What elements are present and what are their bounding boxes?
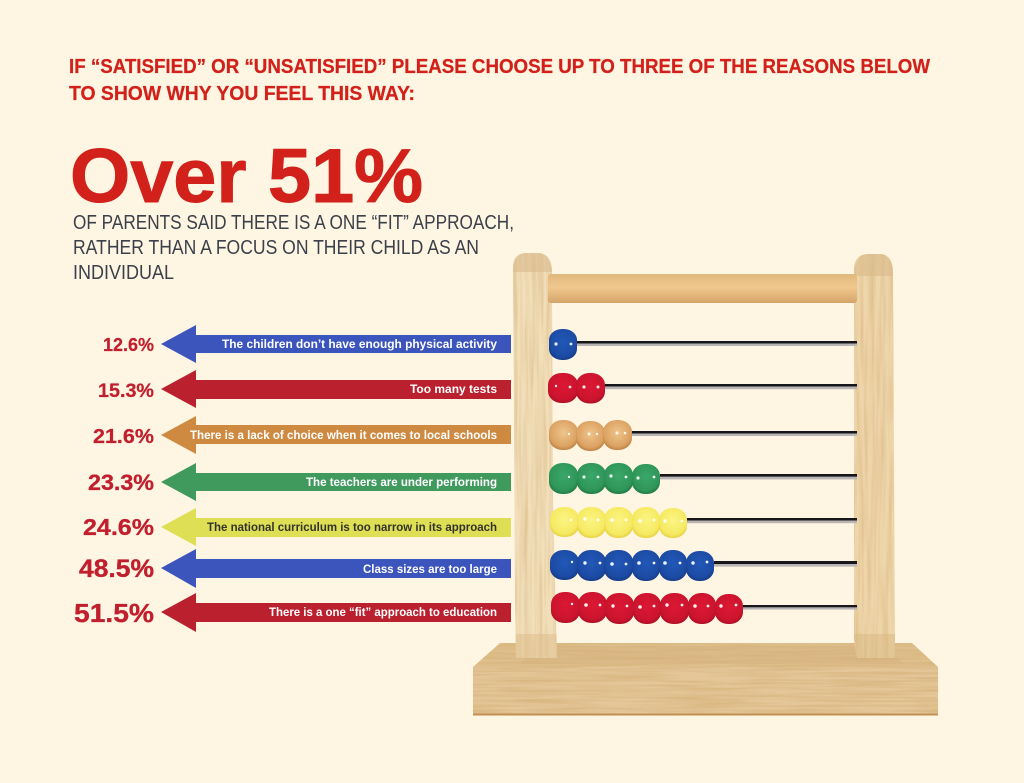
heading: TO SHOW WHY YOU FEEL THIS WAY: [69,82,415,105]
row: national curriculum 24.6%: 24.6% [83,514,154,540]
left post [513,253,557,658]
abacus illustration [473,253,938,716]
statistic description: INDIVIDUAL [73,262,174,284]
row: national curriculum 24.6%: The national curriculum is too narrow in its approach [207,520,497,534]
row: teachers 23.3% [88,463,511,501]
row: one fit approach 51.5% [74,593,511,632]
beads row 3: orange [549,420,632,451]
row: physical activity 12.6%: The children don’t have enough physical activity [222,337,497,351]
beads row 4: green [549,463,660,494]
row: too many tests 15.3%: 15.3% [98,380,154,402]
row: physical activity 12.6% [103,325,511,363]
row: teachers 23.3%: The teachers are under performing [306,475,497,489]
row: lack of choice 21.6%: There is a lack of choice when it comes to local schools [190,428,497,442]
row: lack of choice 21.6%: 21.6% [93,425,154,448]
row: national curriculum 24.6% [83,508,511,546]
row: class sizes 48.5% [79,549,511,588]
row: one fit approach 51.5%: There is a one “fit” approach to education [269,605,497,619]
heading [69,55,931,105]
row: too many tests 15.3%: Too many tests [410,382,497,396]
row: physical activity 12.6%: 12.6% [103,334,154,355]
row: teachers 23.3%: 23.3% [88,470,154,495]
beads row 6: dark blue [550,550,714,581]
beads row 2: red [548,373,605,404]
abacus base [473,643,938,716]
right post [854,254,895,658]
statistic description: RATHER THAN A FOCUS ON THEIR CHILD AS AN [73,237,479,259]
heading: IF “SATISFIED” OR “UNSATISFIED” PLEASE CHOOSE UP TO THREE OF THE REASONS BELOW [69,55,931,78]
beads row 5: yellow [550,507,687,538]
statistic description: OF PARENTS SAID THERE IS A ONE “FIT” APPROACH, [73,212,514,234]
statistic description [73,212,514,284]
wire rods [577,341,857,610]
big statistic: Over 51%: Over 51% [70,134,423,219]
row: one fit approach 51.5%: 51.5% [74,598,154,628]
beads row 7: red [551,592,743,624]
row: class sizes 48.5%: 48.5% [79,555,154,583]
row: lack of choice 21.6% [93,416,511,454]
row: class sizes 48.5%: Class sizes are too large [363,562,497,576]
top crossbar [548,274,857,303]
row: too many tests 15.3% [98,370,511,408]
beads row 1: blue [549,329,577,360]
reasons chart [74,325,511,632]
